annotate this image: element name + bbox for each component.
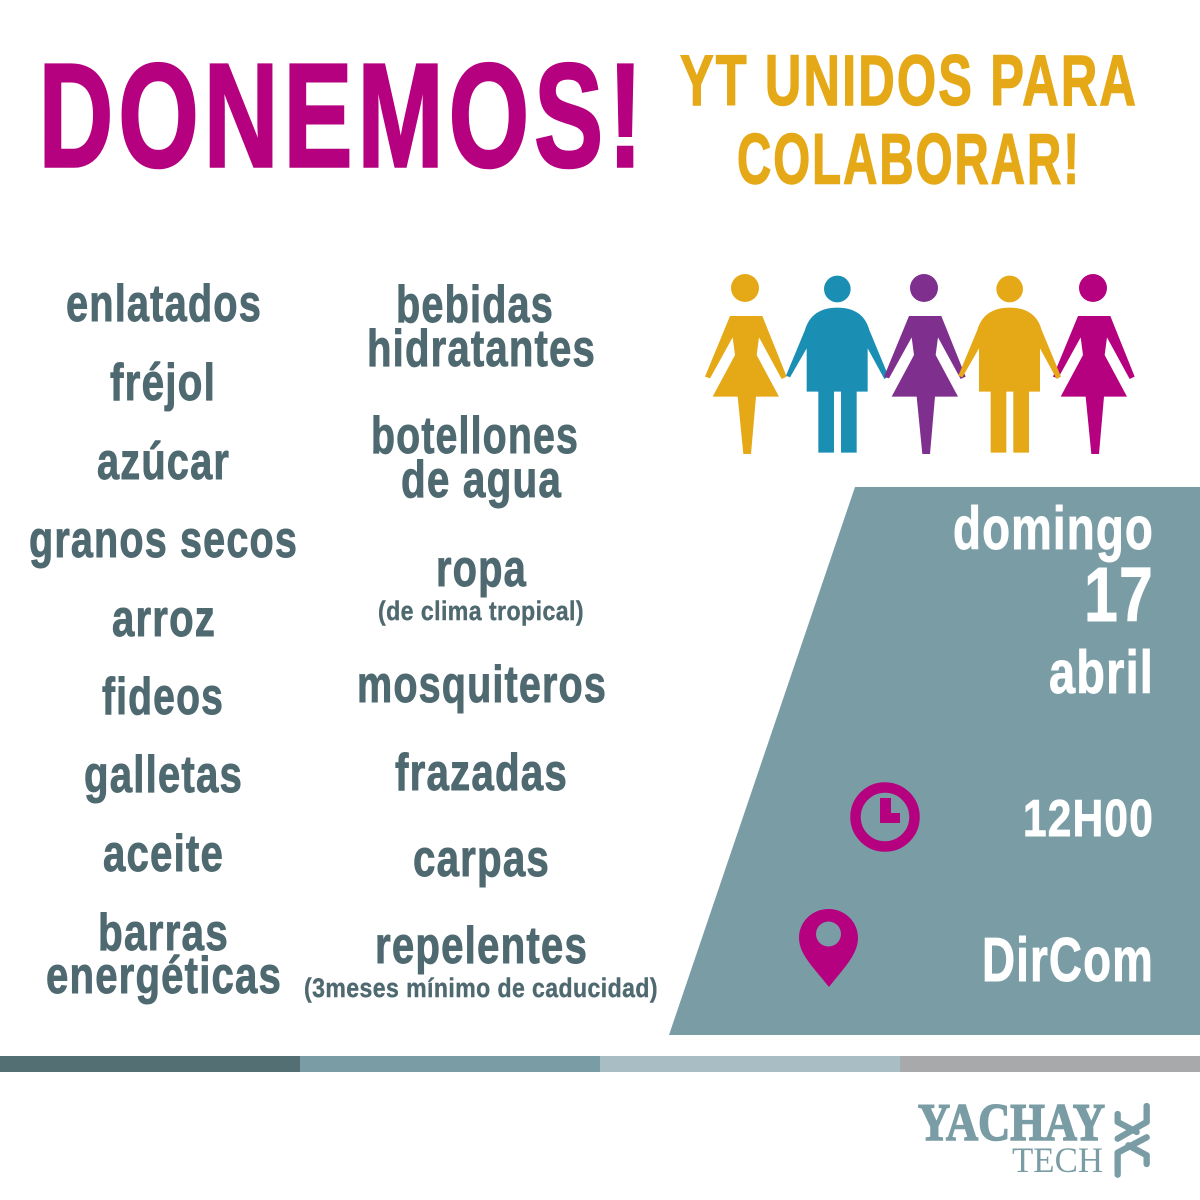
list: supplies donations: de agua (401, 451, 562, 509)
list: supplies donations: (de clima tropical) (378, 596, 584, 626)
man: blue (786, 276, 889, 453)
list: food donations: energéticas (46, 947, 282, 1005)
date: abril (1049, 639, 1154, 706)
list: supplies donations: ropa (436, 540, 527, 598)
woman: purple (884, 274, 966, 454)
list: food donations: granos secos (29, 511, 298, 569)
subtitle: YT unidos para colaborar (680, 42, 1138, 200)
list: supplies donations: frazadas (395, 744, 568, 802)
logo: Yachay Tech (918, 1094, 1147, 1180)
time: 12H00 (1023, 790, 1154, 848)
list: food donations (29, 275, 298, 1005)
list: supplies donations (304, 276, 658, 1003)
man: yellow (958, 276, 1061, 453)
list: supplies donations: (3meses mínimo de caducidad) (304, 973, 658, 1003)
list: supplies donations: carpas (413, 830, 550, 888)
icon: clock (856, 788, 914, 846)
color strip (0, 1056, 1200, 1072)
list: food donations: arroz (112, 590, 216, 648)
logo: Yachay Tech: TECH (1012, 1140, 1103, 1180)
list: food donations: fréjol (110, 354, 216, 412)
woman: yellow (705, 274, 787, 454)
list: food donations: enlatados (66, 275, 262, 333)
list: supplies donations: botellones (371, 407, 579, 465)
woman: magenta (1053, 274, 1135, 454)
logo: Yachay Tech: YACHAY (918, 1094, 1105, 1152)
list: supplies donations: hidratantes (367, 320, 596, 378)
panel: event details (669, 487, 1200, 1035)
logo mark (1118, 1106, 1147, 1175)
icon: five people holding hands (705, 274, 1135, 454)
icon: location pin (799, 909, 858, 987)
list: supplies donations: repelentes (375, 917, 588, 975)
list: supplies donations: mosquiteros (357, 656, 607, 714)
title: DONEMOS!: DONEMOS! (38, 34, 648, 198)
list: supplies donations: bebidas (396, 276, 554, 334)
list: food donations: fideos (102, 668, 224, 726)
list: food donations: barras (98, 904, 229, 962)
list: food donations: azúcar (97, 433, 230, 491)
list: food donations: aceite (103, 825, 224, 883)
date (953, 495, 1154, 706)
date: 17 (1084, 552, 1154, 638)
list: food donations: galletas (84, 746, 243, 804)
